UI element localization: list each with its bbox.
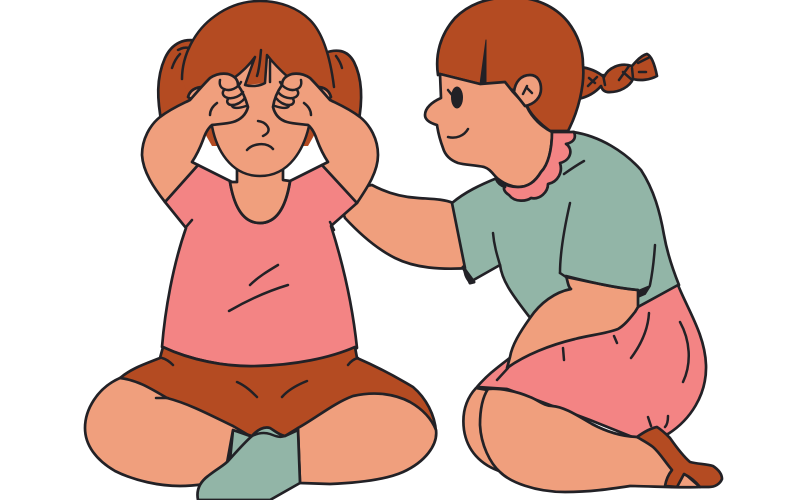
lower leg (480, 389, 700, 492)
left arm and fist (142, 74, 248, 202)
skirt creases (497, 313, 689, 427)
thigh crease (156, 397, 168, 399)
shorts (120, 347, 436, 445)
scalloped pink collar (496, 132, 575, 201)
left fist fingers (210, 80, 246, 115)
hair (182, 1, 334, 146)
eyelash (448, 90, 452, 95)
sleeve hem line (560, 203, 655, 285)
shirt creases (186, 220, 334, 311)
sad mouth (247, 144, 273, 150)
smile (448, 129, 468, 138)
eye (451, 86, 463, 108)
sleeve bottom (560, 273, 638, 290)
shirt crease lines (493, 161, 584, 265)
bang split (480, 40, 486, 84)
right ear (317, 87, 331, 105)
dark sleeve shadows (463, 267, 650, 297)
crying girl (85, 1, 436, 500)
face (212, 55, 309, 176)
bangs lines (234, 50, 289, 86)
green foot (197, 427, 300, 500)
shorts creases (162, 358, 358, 397)
pink shirt (162, 165, 357, 367)
right arm and fist (273, 74, 378, 203)
pink skirt (477, 285, 706, 440)
hair (437, 0, 583, 131)
ear (514, 75, 541, 106)
green shirt (452, 132, 679, 319)
girl's face (425, 74, 552, 187)
right pigtail (310, 51, 361, 125)
nose (258, 121, 269, 136)
right fist fingers (275, 80, 311, 115)
left ear (188, 87, 204, 105)
ear detail (523, 86, 532, 94)
sandal strap and foot (637, 427, 722, 487)
foot top line (252, 433, 285, 437)
comforting arm of the kneeling girl (340, 185, 470, 269)
knee back (463, 388, 510, 472)
neck (230, 165, 290, 223)
left pigtail (158, 40, 210, 125)
forearm on the lap (507, 276, 638, 368)
green sock leg (227, 428, 300, 490)
left thigh (85, 378, 250, 486)
right thigh (298, 394, 436, 484)
pigtail strands (172, 48, 342, 68)
braid (578, 54, 657, 99)
kneeling girl (425, 0, 722, 492)
